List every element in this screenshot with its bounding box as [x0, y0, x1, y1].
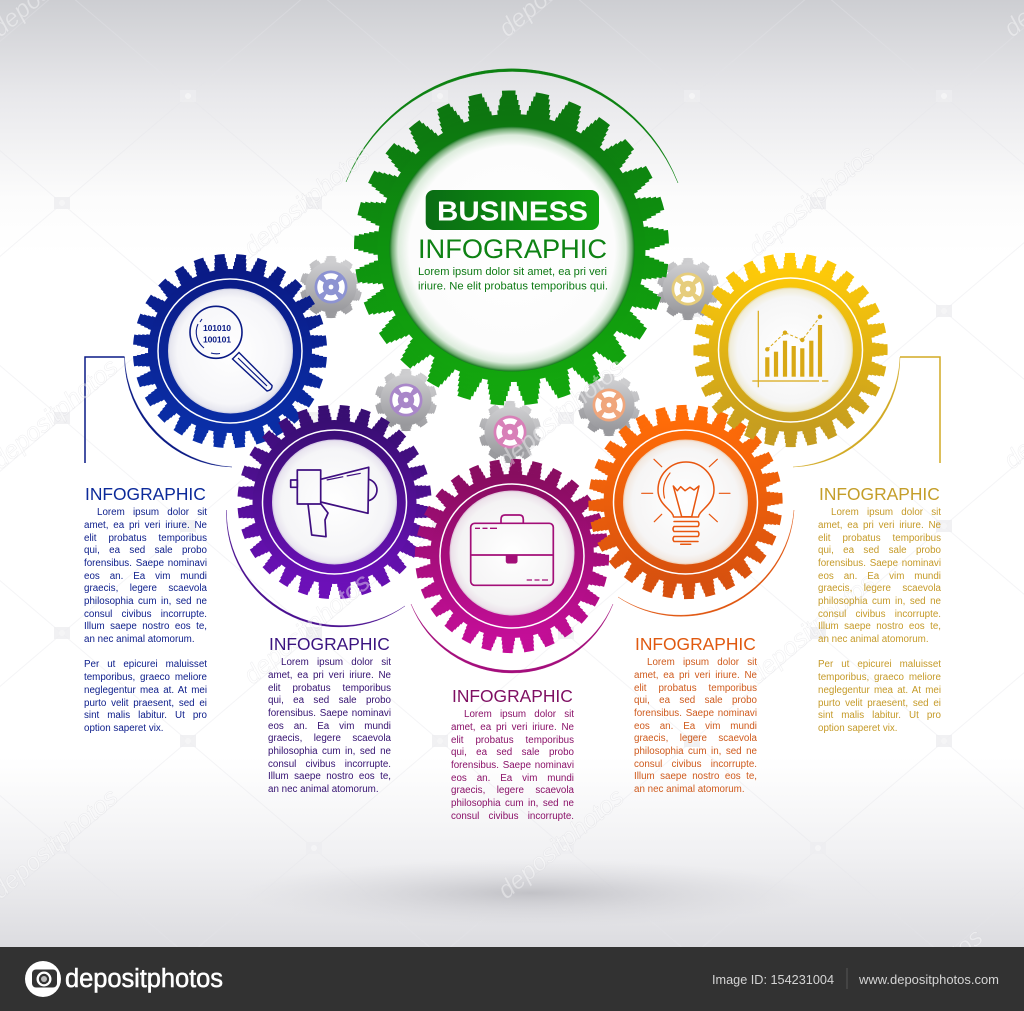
text column: yellow: an nec animal atomorum. [818, 634, 929, 645]
text column: blue: consul civibus incorrupte. [84, 609, 207, 620]
orange gear [587, 404, 784, 600]
text column: magenta: qui, ea sed sale probo [451, 747, 574, 758]
text column: blue: qui, ea sed sale probo [84, 545, 207, 556]
text column: orange: elit probatus temporibus [634, 683, 757, 694]
text column: blue: amet, ea pri veri iriure. Ne [84, 520, 207, 531]
icon: briefcase [471, 515, 553, 585]
watermarks: depositphotos [238, 568, 375, 690]
text column: yellow: amet, ea pri veri iriure. Ne [818, 520, 941, 531]
footer bar [0, 947, 1024, 1011]
text column: magenta [451, 686, 574, 822]
text column: purple: an nec animal atomorum. [268, 784, 379, 795]
central description: iriure. Ne elit probatus temporibus qui. [418, 280, 608, 292]
footer image id: Image ID: 154231004 [712, 973, 834, 987]
orange arc [618, 510, 794, 616]
blue gear [124, 245, 336, 457]
text column: blue: graecis, legere scaevola [84, 583, 207, 594]
text column: magenta: elit probatus temporibus [451, 735, 574, 746]
text column: yellow: Illum saepe nostro eos te, [818, 621, 941, 632]
text column: yellow: elit probatus temporibus [818, 533, 941, 544]
main green gear [346, 82, 677, 414]
text column: orange: an nec animal atomorum. [634, 784, 745, 795]
text column: blue: elit probatus temporibus [84, 533, 207, 544]
small grey gear: magenta [472, 394, 548, 470]
text column: orange: Lorem ipsum dolor sit [647, 657, 757, 668]
blue bracket and arc [85, 357, 232, 467]
text column: purple: eos an. Ea vim mundi [268, 721, 391, 732]
text column: purple: consul civibus incorrupte. [268, 759, 391, 770]
text column: purple: philosophia cum in, sed ne [268, 746, 391, 757]
text column: yellow: neglegentur mea at. At mei [818, 685, 941, 696]
text column: yellow: graecis, legere scaevola [818, 583, 941, 594]
icon: magnifier with binary: 100101 [203, 334, 231, 344]
text column: yellow: qui, ea sed sale probo [818, 545, 941, 556]
text column: yellow: INFOGRAPHIC [819, 484, 940, 504]
text column: yellow: purto velit praesent, sed ei [818, 698, 941, 708]
text column: blue: eos an. Ea vim mundi [84, 571, 207, 582]
central title badge: BUSINESS [437, 196, 588, 226]
icon: light bulb [642, 459, 730, 544]
small grey gear: blue [293, 249, 369, 325]
text column: orange [634, 634, 757, 795]
watermarks: depositphotos [743, 140, 880, 262]
footer separator [846, 968, 848, 989]
text column: magenta: amet, ea pri veri iriure. Ne [451, 722, 574, 733]
text column: blue: forensibus. Saepe nominavi [84, 558, 207, 569]
text column: yellow: eos an. Ea vim mundi [818, 571, 941, 582]
text column: blue: an nec animal atomorum. [84, 634, 195, 645]
text column: orange: philosophia cum in, sed ne [634, 746, 757, 757]
text column: purple: INFOGRAPHIC [269, 634, 390, 654]
text column: magenta: INFOGRAPHIC [452, 686, 573, 706]
purple gear [229, 397, 440, 607]
icon: megaphone [291, 467, 377, 537]
text column: purple: Lorem ipsum dolor sit [281, 657, 391, 668]
text column: magenta: consul civibus incorrupte. [451, 811, 574, 822]
text column: orange: Illum saepe nostro eos te, [634, 771, 757, 782]
text column: blue: Illum saepe nostro eos te, [84, 621, 207, 632]
text column: orange: forensibus. Saepe nominavi [634, 708, 757, 719]
floor shadow [240, 859, 820, 927]
icon: bar chart with trend line [752, 311, 828, 387]
text column: yellow: option saperet vix. [818, 723, 898, 734]
purple arc [226, 510, 405, 627]
text column: purple: qui, ea sed sale probo [268, 695, 391, 706]
small grey gear: yellow [650, 251, 726, 327]
footer logo mark [25, 961, 61, 997]
text column: magenta: graecis, legere scaevola [451, 785, 574, 796]
text column: magenta: philosophia cum in, sed ne [451, 798, 574, 809]
watermarks: depositphotos [743, 568, 880, 690]
text column: orange: INFOGRAPHIC [635, 634, 756, 654]
watermarks: depositphotos [492, 783, 629, 905]
text column: purple [268, 634, 391, 795]
magenta gear [413, 457, 611, 655]
text column: blue: purto velit praesent, sed ei [84, 698, 207, 708]
text column: orange: consul civibus incorrupte. [634, 759, 757, 770]
text column: blue: neglegentur mea at. At mei [84, 685, 207, 696]
green arc above main gear [346, 69, 678, 183]
text column: blue: temporibus, graeco meliore [84, 672, 207, 683]
footer brand name: depositphotos [65, 965, 223, 993]
text column: magenta: Lorem ipsum dolor sit [464, 709, 574, 720]
text column: blue: INFOGRAPHIC [85, 484, 206, 504]
text column: magenta: forensibus. Saepe nominavi [451, 760, 574, 771]
text column: blue: option saperet vix. [84, 723, 164, 734]
text column: purple: forensibus. Saepe nominavi [268, 708, 391, 719]
text column: purple: elit probatus temporibus [268, 683, 391, 694]
yellow gear [696, 255, 886, 445]
text column: yellow: Lorem ipsum dolor sit [831, 507, 941, 518]
text column: orange: graecis, legere scaevola [634, 733, 757, 744]
icon: magnifier with binary: 101010 [203, 323, 231, 333]
text column: orange: eos an. Ea vim mundi [634, 721, 757, 732]
central description: Lorem ipsum dolor sit amet, ea pri veri [418, 266, 607, 278]
text column: yellow: consul civibus incorrupte. [818, 609, 941, 620]
text column: orange: amet, ea pri veri iriure. Ne [634, 670, 757, 681]
text column: orange: qui, ea sed sale probo [634, 695, 757, 706]
text column: purple: Illum saepe nostro eos te, [268, 771, 391, 782]
text column: blue: Per ut epicurei maluisset [84, 659, 207, 670]
text column: blue [84, 484, 207, 734]
text column: blue: sint malis labitur. Ut pro [84, 710, 207, 721]
text column: purple: graecis, legere scaevola [268, 733, 391, 744]
text column: purple: amet, ea pri veri iriure. Ne [268, 670, 391, 681]
text column: blue: philosophia cum in, sed ne [84, 596, 207, 607]
small grey gear: purple [368, 362, 444, 438]
central title badge [426, 190, 599, 230]
text column: yellow: philosophia cum in, sed ne [818, 596, 941, 607]
text column: yellow: forensibus. Saepe nominavi [818, 558, 941, 569]
watermarks: depositphotos [492, 353, 629, 475]
icon: magnifier with binary [190, 306, 272, 391]
watermarks: depositphotos [238, 140, 375, 262]
text column: yellow [818, 484, 941, 734]
magenta arc [411, 604, 613, 673]
text column: magenta: eos an. Ea vim mundi [451, 773, 574, 784]
text column: yellow: sint malis labitur. Ut pro [818, 710, 941, 721]
footer website: www.depositphotos.com [858, 973, 999, 987]
central description [418, 266, 608, 292]
yellow bracket and arc [793, 357, 940, 467]
central subtitle: INFOGRAPHIC [418, 233, 607, 264]
small grey gear: orange [571, 367, 647, 443]
text column: yellow: Per ut epicurei maluisset [818, 659, 941, 670]
text column: yellow: temporibus, graeco meliore [818, 672, 941, 683]
text column: blue: Lorem ipsum dolor sit [97, 507, 207, 518]
